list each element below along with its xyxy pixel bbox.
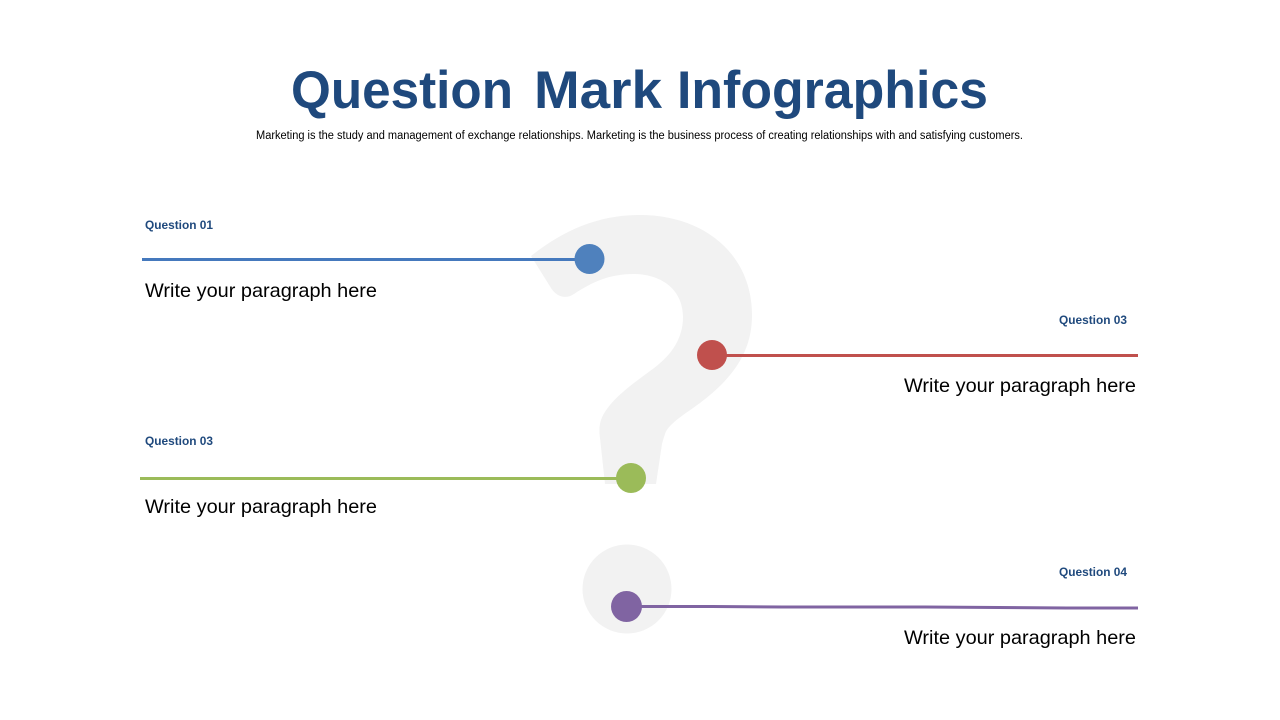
title: Infographics: [677, 61, 988, 120]
question 03 left marker: [616, 463, 646, 493]
title: Mark: [534, 61, 663, 120]
question 04 paragraph: Write your paragraph here: [904, 627, 1136, 649]
title: [291, 61, 988, 120]
question 01 marker: [574, 244, 604, 274]
subtitle: Marketing is the study and management of exchange relationships. Marketing is the business process of creating relationships with and satisfying customers.: [256, 130, 1023, 142]
panel: question 01: [142, 218, 604, 302]
icon: question mark background: [531, 215, 752, 634]
title: Question: [291, 61, 513, 120]
question 01 connector line: [142, 258, 590, 261]
question 03 right paragraph: Write your paragraph here: [904, 375, 1136, 397]
question 03 left connector line: [140, 477, 631, 480]
question 04 label: Question 04: [1059, 565, 1127, 579]
question 03 left paragraph: Write your paragraph here: [145, 496, 377, 518]
question 03 right label: Question 03: [1059, 313, 1127, 327]
panel: question 03 right: [697, 313, 1138, 397]
question 04 marker: [611, 591, 642, 622]
panel: question 03 left: [140, 434, 646, 518]
panel: question 04: [611, 565, 1138, 649]
question 03 right marker: [697, 340, 727, 370]
question 01 label: Question 01: [145, 218, 213, 232]
question 01 paragraph: Write your paragraph here: [145, 280, 377, 302]
question 03 left label: Question 03: [145, 434, 213, 448]
question 04 connector line: [627, 606, 1138, 608]
question 03 right connector line: [712, 354, 1138, 357]
